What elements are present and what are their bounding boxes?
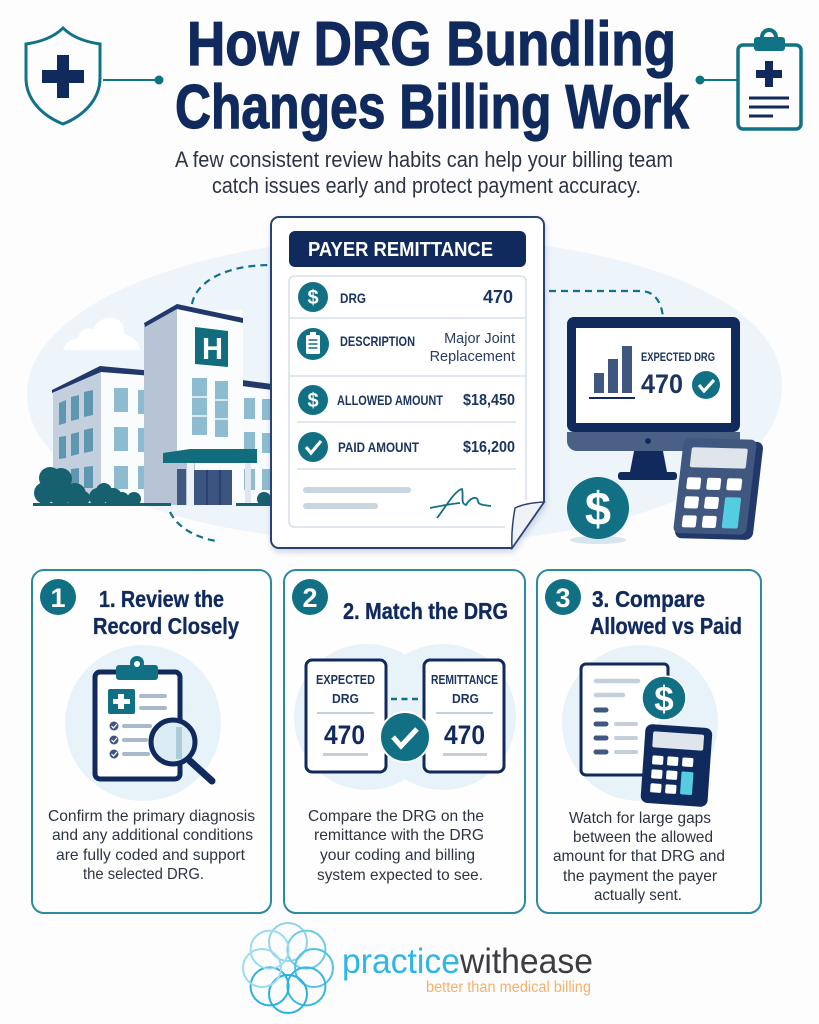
- card 2 body text: remittance with the DRG: [314, 827, 484, 844]
- card 1 heading: 1. Review the: [99, 586, 224, 612]
- background ellipse: [27, 236, 782, 544]
- row: allowed amount: [298, 385, 515, 415]
- step badge 2: [292, 579, 328, 615]
- central tower: [144, 304, 243, 505]
- expected DRG box: 470: [324, 720, 365, 750]
- expected DRG box: EXPECTED: [316, 672, 375, 687]
- panel: payer remittance document: [271, 217, 544, 548]
- logo: practicewithease: [243, 923, 593, 1013]
- check badge: [692, 371, 720, 399]
- row: paid amount: PAID AMOUNT: [338, 439, 419, 455]
- illustration: monitor: [567, 317, 740, 480]
- icon: clipboard with magnifier: [65, 645, 221, 801]
- icon: shield with cross: [26, 28, 164, 124]
- row: description: DESCRIPTION: [340, 333, 415, 349]
- hospital sign: H: [202, 331, 223, 366]
- card 2 heading: 2. Match the DRG: [343, 598, 508, 624]
- entrance: [163, 449, 257, 505]
- left wing: [52, 366, 165, 505]
- step badge 1: 1: [50, 583, 66, 613]
- signature: [430, 489, 491, 518]
- bar chart: [589, 346, 635, 399]
- card 3 body text: actually sent.: [594, 887, 682, 904]
- card 3 body text: amount for that DRG and: [553, 848, 725, 865]
- remittance DRG box: 470: [444, 720, 485, 750]
- card 3 body text: between the allowed: [573, 829, 713, 846]
- logo: practicewithease: withease: [459, 942, 593, 981]
- subtitle: [175, 147, 673, 198]
- row: paid amount: $16,200: [463, 439, 515, 456]
- icon: dollar coin: [567, 477, 629, 544]
- remittance DRG box: REMITTANCE: [431, 672, 498, 687]
- card 3 heading: Allowed vs Paid: [590, 613, 742, 639]
- row: description: [297, 328, 515, 365]
- placeholder lines: [303, 487, 411, 509]
- icon: calculator: [672, 438, 764, 540]
- icon: statement, coin and calculator: $: [654, 680, 674, 719]
- step badge 1: [40, 579, 76, 615]
- row: allowed amount: $18,450: [463, 392, 515, 409]
- document header: [289, 231, 526, 267]
- table frame: [289, 276, 526, 527]
- panel: card 1 review the record: [32, 570, 271, 913]
- card 1 body text: the selected DRG.: [83, 866, 204, 883]
- card 2 body text: [308, 808, 484, 884]
- title: How DRG Bundling: [187, 10, 676, 79]
- logo: practicewithease: practice: [342, 942, 460, 981]
- card 1 body text: are fully coded and support: [56, 847, 246, 864]
- row: DRG: $: [307, 287, 319, 309]
- dashed connectors: [170, 265, 663, 541]
- row: description: Major Joint: [444, 331, 515, 347]
- logo flower mark: [243, 923, 333, 1013]
- card 3 heading: [590, 586, 742, 639]
- expected DRG box: [306, 660, 386, 772]
- subtitle: A few consistent review habits can help your billing team: [175, 147, 673, 172]
- step badge 2: 2: [302, 583, 318, 613]
- card 1 body text: Confirm the primary diagnosis: [48, 808, 255, 825]
- card 2 body text: system expected to see.: [317, 867, 483, 884]
- step badge 3: 3: [555, 583, 571, 613]
- check badge: [380, 712, 430, 762]
- illustration: monitor: 470: [641, 369, 683, 399]
- row: DRG: DRG: [340, 290, 366, 306]
- background circles: [294, 644, 516, 790]
- panel: card 3 compare allowed vs paid: [537, 570, 761, 913]
- card 2 body text: your coding and billing: [320, 847, 475, 864]
- panel: card 2 match the DRG: [284, 570, 525, 913]
- document header: PAYER REMITTANCE: [308, 239, 493, 261]
- title: [175, 10, 689, 142]
- card 3 heading: 3. Compare: [592, 586, 705, 612]
- row: allowed amount: $: [307, 390, 319, 412]
- logo: practicewithease: better than medical billing: [426, 979, 591, 996]
- illustration: monitor: EXPECTED DRG: [641, 350, 715, 364]
- row: description: Replacement: [430, 349, 515, 365]
- card 1 heading: Record Closely: [93, 613, 239, 639]
- right wing: [242, 380, 272, 505]
- cloud: [63, 318, 140, 350]
- hospital sign: [195, 327, 228, 367]
- page fold: [512, 502, 544, 548]
- card 3 body text: the payment the payer: [563, 868, 718, 885]
- illustration: hospital: [33, 304, 272, 506]
- card 3 body text: [553, 810, 725, 904]
- subtitle: catch issues early and protect payment accuracy.: [212, 173, 641, 198]
- step badge 3: [545, 579, 581, 615]
- icon: statement, coin and calculator: [562, 645, 718, 807]
- row: DRG: 470: [483, 287, 513, 307]
- card 2 body text: Compare the DRG on the: [308, 808, 484, 825]
- row: allowed amount: ALLOWED AMOUNT: [337, 392, 443, 408]
- card 3 body text: Watch for large gaps: [569, 810, 711, 827]
- row: paid amount: [298, 432, 515, 462]
- row: DRG: [298, 282, 513, 312]
- remittance DRG box: [424, 660, 504, 772]
- card 1 heading: [93, 586, 239, 639]
- title: Changes Billing Work: [175, 73, 689, 142]
- card 1 body text: and any additional conditions: [52, 827, 253, 844]
- icon: dollar coin: $: [585, 482, 611, 535]
- card 1 body text: [48, 808, 255, 883]
- remittance DRG box: DRG: [452, 691, 479, 706]
- bushes: [33, 467, 272, 506]
- icon: clipboard with cross: [696, 30, 801, 129]
- expected DRG box: DRG: [332, 691, 359, 706]
